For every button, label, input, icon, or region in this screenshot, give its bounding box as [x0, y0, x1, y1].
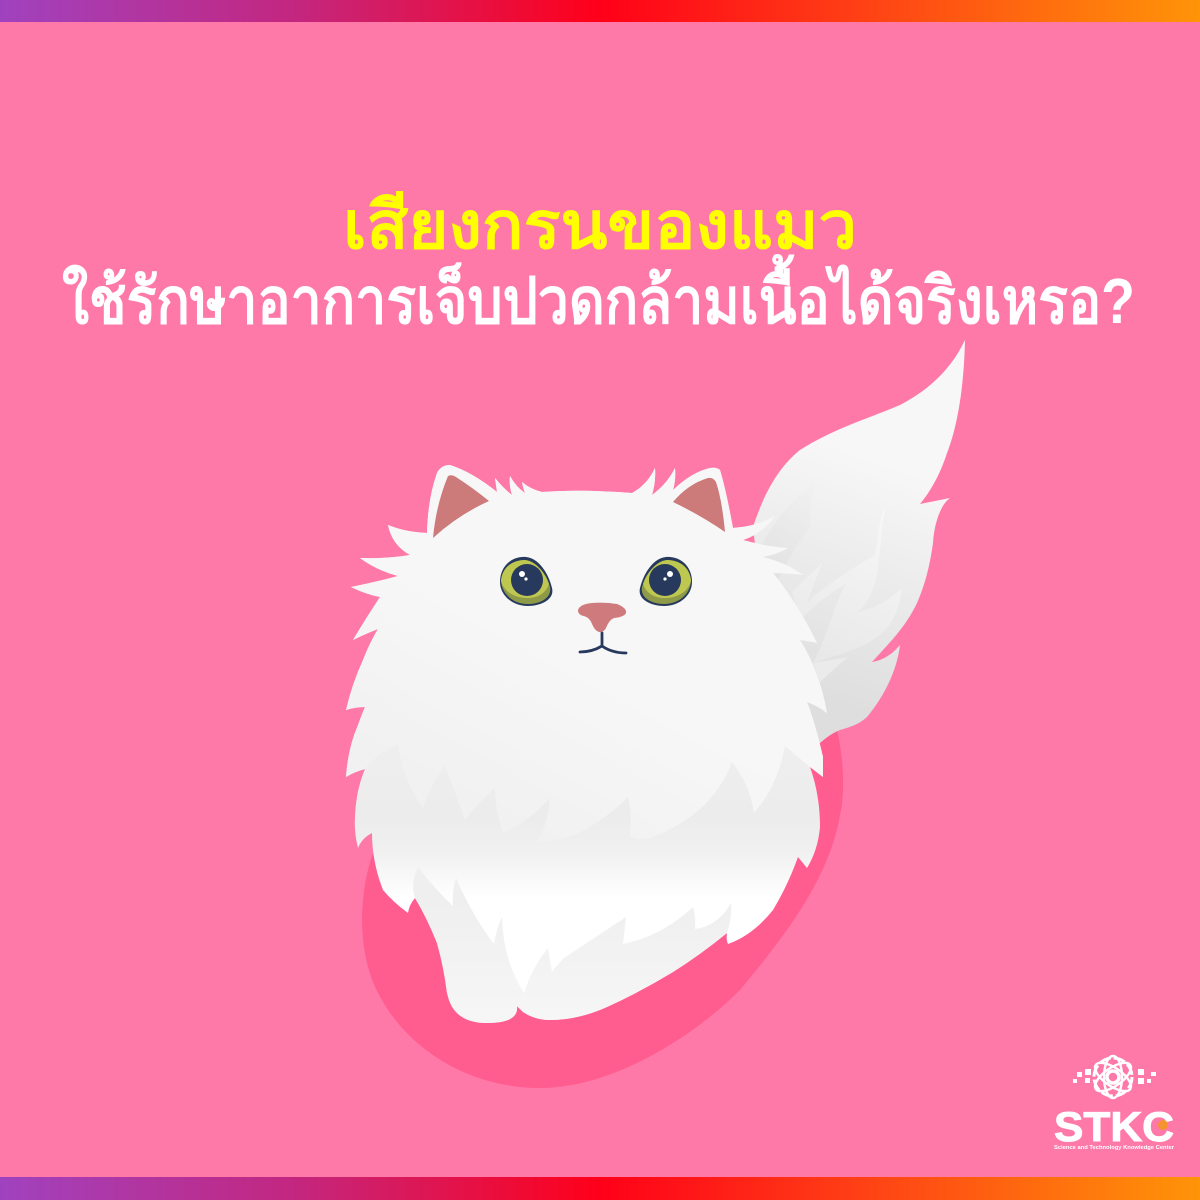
dark pink blob shadow: [362, 730, 843, 1088]
logo side dots: [1073, 1069, 1156, 1084]
title line 1: เสียงกรนของแมว: [343, 188, 857, 262]
top gradient bar: [0, 0, 1200, 22]
right eye: [640, 557, 692, 606]
illustration: white cat: [346, 340, 965, 1088]
front leg right: [517, 903, 731, 1020]
tail: [753, 340, 965, 760]
tail upper-left feather: [762, 483, 815, 590]
tail silhouette: [753, 340, 965, 760]
tail small light tuft: [813, 657, 848, 682]
logo atom icon: [1091, 1056, 1135, 1098]
tail lower feathers: [792, 505, 902, 663]
left eye: [500, 557, 552, 606]
cat body silhouette with fur: [346, 465, 827, 1023]
left ear: [433, 475, 489, 538]
front leg left: [413, 867, 524, 1023]
logo tagline: Science and Technology Knowledge Center: [1054, 1145, 1175, 1151]
nose: [578, 603, 626, 632]
logo wordmark: STKC: [1054, 1103, 1174, 1150]
bottom gradient bar: [0, 1177, 1200, 1200]
mantle fur overlay: [346, 465, 827, 842]
logo orange dot: [1158, 1120, 1168, 1130]
title: [62, 188, 1135, 337]
mouth: [580, 633, 626, 653]
logo: STKC: [1054, 1056, 1175, 1151]
right ear: [673, 478, 725, 532]
